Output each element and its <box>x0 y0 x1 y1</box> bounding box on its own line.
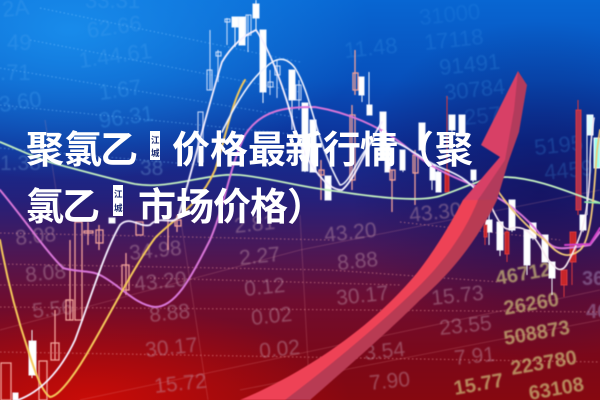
watermark box line 2: 江 <box>114 189 123 199</box>
faint price numbers: 43.20 <box>323 219 378 247</box>
faint price numbers: 5.56 <box>31 296 74 323</box>
faint price numbers: 46712 <box>494 259 553 290</box>
faint price numbers: 0.02 <box>250 303 293 330</box>
title line 2: 场 <box>176 187 214 229</box>
title line 2: 市 <box>138 187 176 229</box>
outline candles blue area <box>198 15 301 162</box>
faint price numbers: 15.72 <box>153 370 208 398</box>
white average line right <box>491 118 594 269</box>
faint price numbers: 43.20 <box>133 268 188 296</box>
faint price numbers: 7.90 <box>368 368 411 395</box>
title line 1: （ <box>396 130 434 172</box>
faint price numbers: 49 <box>7 30 31 55</box>
title line 1: 聚 <box>26 130 64 172</box>
watermark box line 2 <box>113 185 123 216</box>
faint price numbers: 5195 <box>533 130 584 160</box>
red rising arrow <box>240 71 527 400</box>
title line 1: 乙 <box>100 130 138 172</box>
faint price numbers: 34.98 <box>128 237 183 265</box>
title line 1: 格 <box>210 130 248 172</box>
faint price numbers: 23.55 <box>438 312 493 340</box>
pale red outline candles <box>1 50 418 400</box>
title <box>26 130 473 229</box>
arrow shaft <box>240 200 497 400</box>
green stub right <box>585 202 600 203</box>
title line 2: 价 <box>213 187 251 229</box>
faint price numbers: 43.30 <box>408 199 463 227</box>
faint price numbers: 223780 <box>509 347 579 380</box>
title line 1: 新 <box>285 130 323 172</box>
faint price numbers: 96.31 <box>97 101 155 133</box>
red candles <box>445 96 581 297</box>
faint price numbers: 8.08 <box>24 260 67 287</box>
faint price numbers: 0.02 <box>258 336 301 363</box>
faint price numbers: 7.91 <box>453 343 496 370</box>
faint price numbers: 26260 <box>502 289 561 320</box>
second white average line <box>222 59 480 195</box>
arrow shaft highlight <box>240 200 478 400</box>
title line 1: 行 <box>323 130 361 172</box>
faint price numbers: 15.73 <box>430 282 485 310</box>
faint price numbers: 8.88 <box>336 248 379 275</box>
title line 1: 聚 <box>435 130 473 172</box>
faint price numbers: 38 <box>140 157 163 180</box>
title line 1: 最 <box>248 130 286 172</box>
faint price numbers: 2.27 <box>238 243 281 270</box>
yellow average line <box>0 80 245 397</box>
faint price numbers: 508873 <box>502 317 572 350</box>
magenta average line <box>0 107 600 307</box>
arrow head left face <box>463 71 520 200</box>
faint price numbers: 1.44.61 <box>77 38 153 73</box>
arrow head right face <box>478 71 527 200</box>
yellow average line right <box>497 130 600 255</box>
faint price numbers: 8.08 <box>14 223 57 250</box>
faint price numbers: 0.12 <box>243 274 286 301</box>
white average line <box>18 30 382 400</box>
title line 2: ） <box>287 187 325 229</box>
title line 2: 格 <box>250 187 288 229</box>
faint price numbers: 62.66 <box>85 11 143 43</box>
faint price numbers: 1.38 <box>0 152 41 175</box>
title line 1: 氯 <box>64 130 102 172</box>
title line 1: 情 <box>360 130 398 172</box>
green average line <box>0 142 600 203</box>
title line 2: 乙 <box>62 187 100 229</box>
watermark box line 1: 江 <box>151 135 160 145</box>
watermark box line 1: 城 <box>151 148 160 158</box>
watermark box line 2: 城 <box>114 203 123 213</box>
faint price numbers: 4459 <box>543 155 594 185</box>
faint price numbers: .71 <box>0 60 31 85</box>
watermark box line 1 <box>150 131 160 160</box>
faint price numbers: 30.17 <box>144 334 199 362</box>
faint price numbers: 15.77 <box>452 370 505 400</box>
faint price numbers: 30.17 <box>335 282 390 310</box>
faint price numbers: 91491 <box>438 49 501 80</box>
title line 2: 氯 <box>26 187 64 229</box>
grid rules <box>0 120 600 400</box>
faint price numbers: 3.54 <box>363 338 406 365</box>
faint price numbers: 1.67 <box>97 74 143 105</box>
faint price numbers: 11.48 <box>343 33 399 63</box>
title line 1: 价 <box>172 130 210 172</box>
faint price numbers: 30784 <box>443 74 506 105</box>
faint price numbers: 2573 <box>463 100 514 130</box>
faint price numbers: 17118 <box>423 24 485 55</box>
magenta stub right <box>565 228 600 245</box>
faint price numbers: 8.88 <box>148 300 191 327</box>
faint price numbers: 2.81 <box>233 211 276 238</box>
